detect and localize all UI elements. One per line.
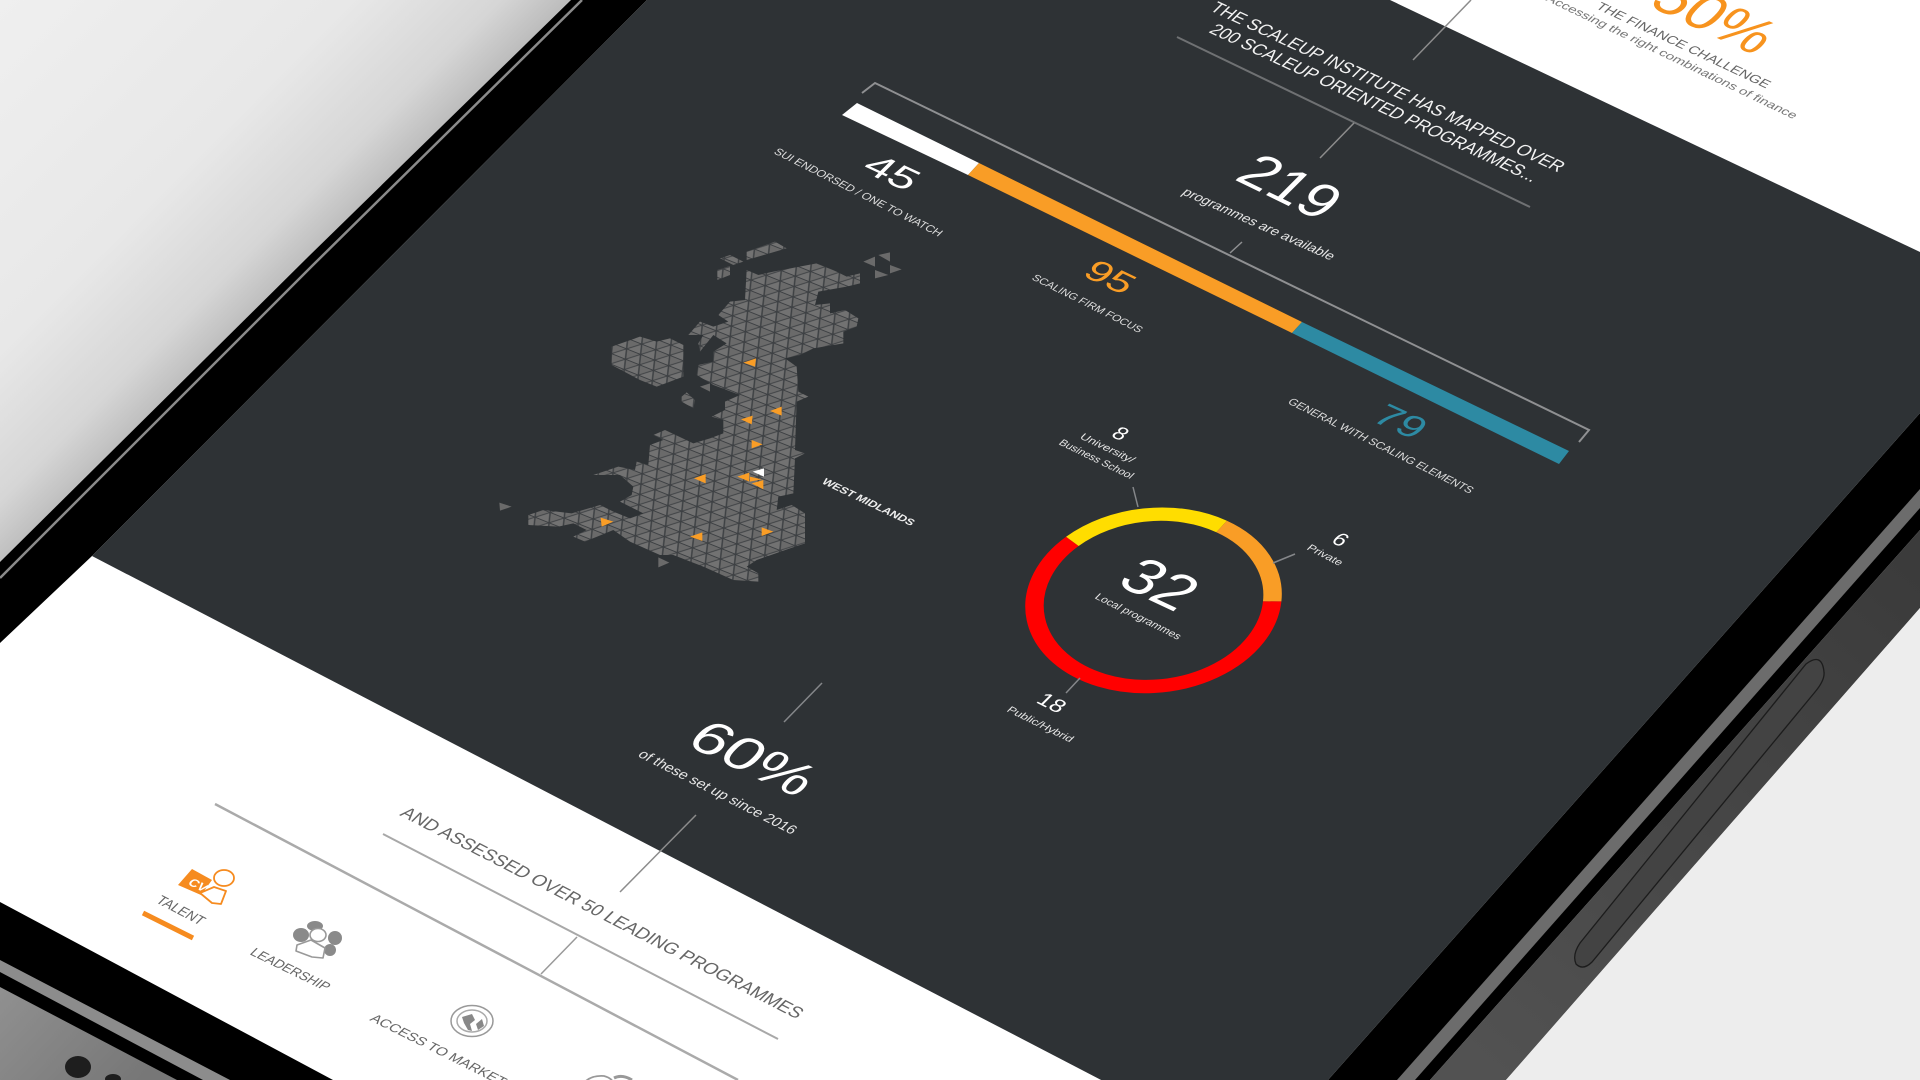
callout: 8 university / business school: University/	[1077, 432, 1137, 465]
rule above tabs	[215, 804, 738, 1080]
label: programmes are available: programmes are available	[1179, 186, 1339, 262]
callout: 6 private: Private	[1304, 543, 1346, 568]
rule under assessed heading	[383, 834, 778, 1039]
label: west midlands: WEST MIDLANDS	[819, 477, 917, 528]
callout: 6 private: 6	[1327, 528, 1355, 551]
heading: the finance challenge: THE FINANCE CHALLENGE	[1593, 0, 1775, 91]
label: scaling firm focus: SCALING FIRM FOCUS	[1029, 273, 1145, 335]
icon: leadership	[293, 921, 342, 958]
background: surface bottom right	[1506, 608, 1920, 1080]
tablet: metal edge highlight right	[1397, 489, 1920, 1080]
connector: 219 to bracket	[1230, 242, 1242, 253]
label: local programmes: Local programmes	[1092, 592, 1184, 642]
tablet: edge strip bottom left	[0, 960, 230, 1080]
icon: talent CV	[178, 869, 234, 904]
tablet: side body right	[1430, 530, 1920, 1080]
connector: assessed heading to tabs	[541, 937, 577, 974]
callout: 18 public/hybrid: Public/Hybrid	[1004, 705, 1076, 745]
label: talent: TALENT	[152, 894, 208, 928]
callout: 8 university / business school	[1056, 422, 1138, 507]
stat: 45: 45	[854, 147, 930, 197]
active tab underline	[143, 913, 193, 938]
stat: 79: 79	[1364, 397, 1437, 446]
callout: 18 public/hybrid: 18	[1032, 688, 1072, 717]
label: of these set up since 2016: of these set up since 2016	[634, 748, 800, 838]
donut chart: 32 local programmes	[987, 481, 1320, 720]
icon: talent CV: CV	[185, 876, 212, 894]
connector: 60 percent to assessed heading	[620, 815, 696, 892]
label: SUI endorsed: SUI ENDORSED / ONE TO WATCH	[771, 147, 945, 239]
stacked bar chart: programme split	[842, 103, 1569, 464]
stat: 32: 32	[1106, 546, 1214, 622]
tablet: port holes	[65, 1056, 121, 1080]
connector: donut to 60 percent	[784, 683, 822, 722]
map: UK triangle grid	[499, 242, 902, 582]
tablet: side button	[1575, 660, 1824, 967]
rule under heading	[1177, 37, 1530, 207]
heading: assessed over 50 leading programmes: AND ASSESSED OVER 50 LEADING PROGRAMMES	[396, 803, 809, 1022]
stat: 95: 95	[1075, 254, 1144, 301]
heading: scaleup institute mapped programmes: THE SCALEUP INSTITUTE HAS MAPPED OVER	[1206, 0, 1570, 175]
heading: scaleup institute mapped programmes: 200 SCALEUP ORIENTED PROGRAMMES...	[1205, 20, 1544, 185]
tablet: side body bottom left	[0, 987, 177, 1080]
background: studio surface top left	[0, 0, 640, 600]
callout: 18 public/hybrid	[1004, 678, 1080, 745]
callout: 8 university / business school: 8	[1107, 422, 1135, 445]
callout: 6 private	[1273, 528, 1355, 568]
icon: fourth tab, cropped	[583, 1076, 632, 1080]
icon: access to markets globe	[451, 1006, 493, 1036]
stat: 60 percent: 60%	[676, 711, 831, 806]
bracket above stacked bar	[862, 83, 1589, 442]
connector: top section to heading	[1413, 0, 1471, 60]
stat: 219: 219	[1224, 144, 1355, 230]
connector: heading to 219	[1320, 123, 1354, 158]
label: general with scaling elements: GENERAL WITH SCALING ELEMENTS	[1285, 397, 1476, 496]
tablet: metal edge highlight top left	[0, 0, 582, 578]
callout: 8 university / business school: Business School	[1056, 438, 1136, 481]
label: leadership: LEADERSHIP	[247, 946, 334, 993]
